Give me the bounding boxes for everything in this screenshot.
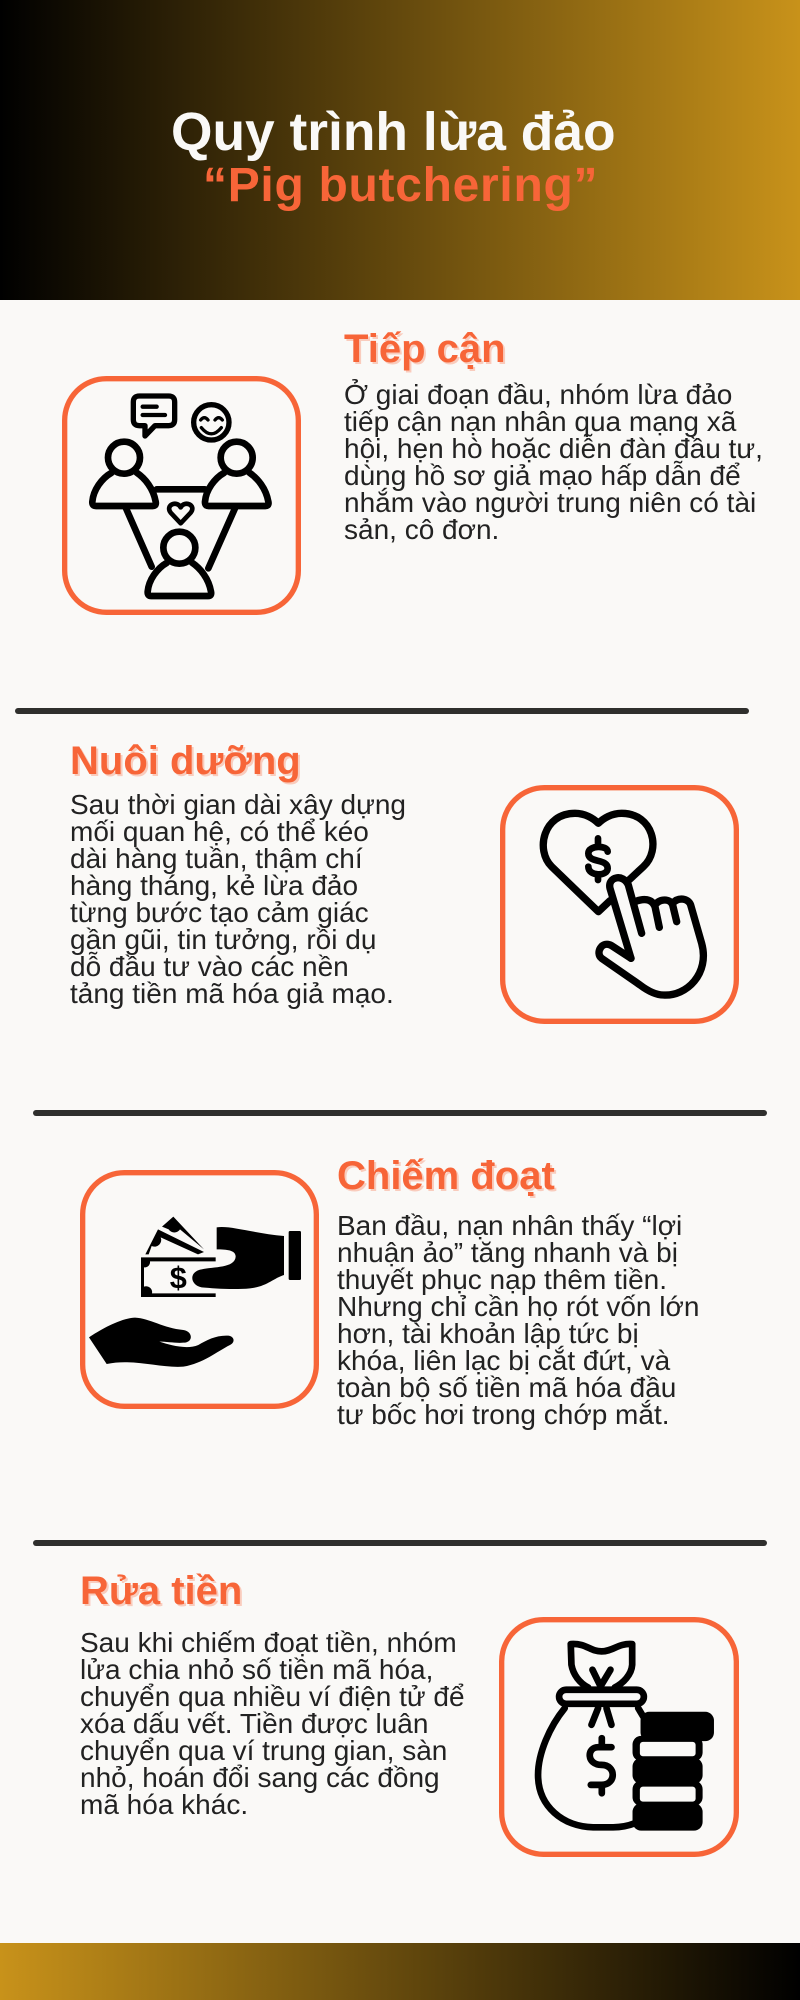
title: Quy trình lừa đảo [171, 103, 616, 162]
text block: hội, hẹn hò hoặc diễn đàn đầu tư, [344, 433, 763, 464]
text block: tư bốc hơi trong chớp mắt. [337, 1399, 670, 1430]
text block: khóa, liên lạc bị cắt đứt, và [337, 1345, 670, 1376]
text block: Nhưng chỉ cần họ rót vốn lớn [337, 1291, 699, 1322]
text block [344, 379, 763, 545]
icon: hands passing money [80, 1170, 319, 1409]
heading: Rửa tiền [80, 1569, 242, 1613]
icon: hands passing money: $ [170, 1261, 187, 1295]
text block: chuyển qua nhiều ví điện tử để [80, 1681, 465, 1712]
panel: Chiếm đoạt [80, 1154, 699, 1430]
text block [80, 1627, 465, 1820]
text block: lửa chia nhỏ số tiền mã hóa, [80, 1654, 433, 1685]
text block: dùng hồ sơ giả mạo hấp dẫn để [344, 460, 741, 491]
text block: tảng tiền mã hóa giả mạo. [70, 978, 394, 1009]
heading: Nuôi dưỡng [70, 739, 301, 783]
icon: money bag and coins [499, 1617, 739, 1857]
text block: nhắm vào người trung niên có tài [344, 487, 756, 518]
text block: Sau khi chiếm đoạt tiền, nhóm [80, 1627, 457, 1658]
text block: xóa dấu vết. Tiền được luân [80, 1708, 428, 1739]
title: “Pig butchering” [203, 159, 598, 212]
text block: hơn, tài khoản lập tức bị [337, 1318, 639, 1349]
text block: mã hóa khác. [80, 1789, 248, 1820]
text block: Ở giai đoạn đầu, nhóm lừa đảo [344, 379, 732, 410]
text block: dài hàng tuần, thậm chí [70, 843, 363, 874]
text block [337, 1210, 699, 1430]
header banner [0, 0, 800, 300]
panel: Tiếp cận [62, 327, 763, 615]
heading: Chiếm đoạt [337, 1154, 555, 1198]
icon: people connecting [62, 376, 301, 615]
panel: Rửa tiền [80, 1569, 739, 1857]
text block: tiếp cận nạn nhân qua mạng xã [344, 406, 736, 437]
text block: toàn bộ số tiền mã hóa đầu [337, 1372, 676, 1403]
text block: chuyển qua ví trung gian, sàn [80, 1735, 447, 1766]
title [171, 103, 616, 212]
heading: Tiếp cận [344, 327, 506, 371]
icon: heart dollar click [500, 785, 739, 1024]
text block [70, 789, 406, 1009]
text block: nhuận ảo” tăng nhanh và bị [337, 1237, 678, 1268]
text block: từng bước tạo cảm giác [70, 897, 369, 928]
text block: nhỏ, hoán đổi sang các đồng [80, 1762, 440, 1793]
text block: gần gũi, tin tưởng, rồi dụ [70, 924, 376, 955]
text block: Sau thời gian dài xây dựng [70, 789, 406, 820]
text block: hàng tháng, kẻ lừa đảo [70, 870, 358, 901]
text block: thuyết phục nạp thêm tiền. [337, 1264, 667, 1295]
text block: Ban đầu, nạn nhân thấy “lợi [337, 1210, 682, 1241]
text block: dỗ đầu tư vào các nền [70, 951, 349, 982]
text block: mối quan hệ, có thể kéo [70, 816, 369, 847]
footer banner [0, 1943, 800, 2000]
text block: sản, cô đơn. [344, 514, 499, 545]
panel: Nuôi dưỡng [70, 739, 739, 1024]
